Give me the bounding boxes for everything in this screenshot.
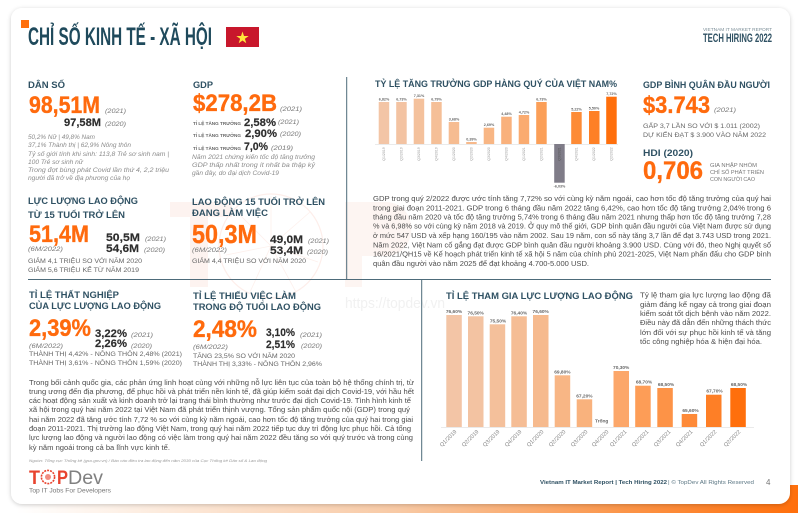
report label: VIETNAM IT MARKET REPORT (703, 27, 772, 32)
panel: GDP: (2021) (280, 106, 302, 113)
chart: labor force participation: 68,50% (658, 382, 675, 388)
panel: employed workers: GIẢM 4,4 TRIỆU SO VỚI NĂM 2020 (192, 256, 306, 265)
chart: labor force participation: 68,70% (636, 380, 653, 386)
panel: GDP per capita: GẤP 3,7 LẦN SO VỚI $ 1.011 (2002) (643, 120, 760, 130)
footer: Vietnam IT Market Report | Tech Hiring 2022 (540, 480, 667, 486)
footer: 4 (766, 478, 771, 487)
chart: labor force participation: 65,60% (682, 408, 699, 414)
text block: GDP commentary: % và 6,98% so với cùng kỳ năm 2018 và 2019. Ở quy mô thế giới, GDP bình quân đầu người của Việt Nam được sử dụng (373, 222, 771, 230)
panel: labor force (28, 195, 166, 274)
panel: underemployment (193, 290, 322, 368)
chart: quarterly GDP growth: 0,39% (466, 138, 477, 142)
panel: underemployment: THÀNH THỊ 3,33% - NÔNG THÔN 2,96% (193, 359, 322, 368)
panel: underemployment: TỈ LỆ THIẾU VIỆC LÀM (193, 290, 296, 302)
chart: quarterly GDP growth: 5,50% (589, 106, 600, 110)
chart: quarterly GDP growth: -6,03% (554, 184, 566, 188)
text block: GDP commentary: GDP trong quý 2/2022 được ước tính tăng 7,72% so với cùng kỳ năm ngoái, cao hơn tốc độ tăng trưởng của quý hai (373, 194, 771, 203)
panel: GDP per capita: (2021) (714, 107, 736, 114)
panel: unemployment: 2,39% (29, 315, 91, 342)
panel: labor force: GIẢM 4,1 TRIỆU SO VỚI NĂM 2020 (28, 256, 142, 265)
panel: employed workers: (2021) (308, 238, 329, 245)
panel: GDP: (2020) (280, 131, 301, 138)
panel: GDP per capita: DỰ KIẾN ĐẠT $ 3.900 VÀO NĂM 2022 (643, 129, 766, 139)
chart: quarterly GDP growth: 6,79% (431, 98, 442, 102)
panel: GDP: 2,90% (245, 128, 277, 140)
chart: labor force participation: Q1/2021 (609, 429, 628, 449)
panel: underemployment: (2021) (300, 332, 322, 339)
chart: labor force participation: TỈ LỆ THAM GIA LỰC LƯỢNG LAO ĐỘNG (446, 290, 633, 302)
chart: quarterly GDP growth: 2,69% (484, 123, 495, 127)
panel: GDP: (2019) (271, 145, 293, 152)
chart: labor force participation: Q4/2021 (675, 429, 694, 449)
chart: labor force participation: 76,40% (511, 310, 528, 316)
panel: GDP: 7,0% (244, 141, 268, 153)
panel: HDI: GIA NHẬP NHÓM (710, 162, 757, 169)
panel: employed workers: (2020) (307, 249, 328, 256)
chart: quarterly GDP growth: 3,68% (449, 118, 460, 122)
chart: quarterly GDP growth: Q4/2021 (575, 147, 579, 161)
panel: GDP per capita: GDP BÌNH QUÂN ĐẦU NGƯỜI (643, 79, 770, 91)
panel: labor force: GIẢM 5,6 TRIỆU KỂ TỪ NĂM 2019 (28, 265, 139, 274)
panel: HDI: 0,706 (643, 157, 703, 185)
panel: GDP: Năm 2021 chứng kiến tốc độ tăng trưởng (192, 154, 316, 161)
text block: labor market context: đoạn 2011-2021. Thị trường lao động Việt Nam, trong quý hai năm 2022 tiếp tục duy trì động lực phục hồi. Cả tổng (29, 424, 411, 433)
chart: labor force participation: Q4/2019 (504, 429, 523, 449)
panel: population: Trong đợt bùng phát Covid lần thứ 4, 2,2 triệu (28, 167, 170, 174)
panel: unemployment: 3,22% (95, 328, 127, 340)
panel: population: 100 Trẻ sơ sinh nữ (28, 159, 84, 166)
panel: population: 97,58M (64, 117, 101, 129)
panel: underemployment: 2,48% (193, 316, 257, 343)
text block: labor market context: kỳ năm ngoái trong cả ba lĩnh vực kinh tế. (29, 443, 170, 452)
panel: labor force: 54,6M (106, 243, 139, 255)
chart: labor force participation: Q1/2022 (699, 429, 718, 449)
divider lines (28, 77, 771, 461)
panel: employed workers (192, 196, 329, 265)
panel: population: (2021) (105, 108, 126, 115)
chart: labor force participation: Q2/2019 (461, 429, 480, 449)
text block: GDP commentary: trong giai đoạn 2011-2021. GDP trong 6 tháng đầu năm 2022 tăng 6,42%, cao hơn tốc độ tăng trưởng 2,04% trong 6 (373, 204, 771, 212)
chart: quarterly GDP growth: 7,72% (606, 92, 617, 96)
panel: HDI: CON NGƯỜI CAO (710, 176, 755, 183)
title: CHỈ SỐ KINH TẾ - XÃ HỘI (28, 21, 212, 51)
panel: unemployment: THÀNH THỊ 4,42% - NÔNG THÔN 2,48% (2021) (29, 349, 182, 358)
text block: participation commentary: kiểm soát tốt dịch bệnh vào năm 2022. (640, 309, 771, 318)
panel: GDP: $278,2B (193, 90, 277, 117)
panel: employed workers: 49,0M (270, 234, 303, 246)
chart: quarterly GDP growth: 6,73% (396, 98, 407, 102)
chart: labor force participation: 68,50% (731, 382, 748, 388)
text block: labor market context: trung ương đến địa phương, để phục hồi và phát triển nền kinh tế, đã giúp kiểm soát đại dịch Covid-19, với hầu hết (29, 387, 414, 396)
text block: participation commentary: tốc công nghiệp hóa & hiện đại hóa. (640, 337, 762, 346)
footer: | © TopDev All Rights Reserved (668, 479, 754, 486)
panel: population (28, 79, 170, 182)
report label (703, 27, 772, 45)
orange square marker (21, 20, 29, 28)
text block: participation commentary: giảm đáng kể ngay cả trong giai đoạn (640, 300, 771, 309)
text block: GDP commentary: ở mức 547 USD và xếp hạng 160/195 vào năm 2002. Sau 19 năm, con số này tăng 3,7 lần để đạt 3.743 USD trong 2021. (373, 231, 771, 240)
chart: quarterly GDP growth: Q3/2020 (487, 147, 491, 161)
panel: GDP: TỈ LỆ TĂNG TRƯỞNG (193, 146, 242, 151)
panel: labor force: (2021) (145, 236, 166, 243)
panel: underemployment: TRONG ĐỘ TUỔI LAO ĐỘNG (193, 301, 321, 313)
chart: quarterly GDP growth: 6,73% (536, 98, 547, 102)
chart: quarterly GDP growth: 4,72% (519, 110, 530, 114)
chart: quarterly GDP growth: 5,22% (571, 108, 582, 112)
panel: population: (2020) (105, 121, 126, 128)
text block: labor market context: Trong bối cảnh quốc gia, các phản ứng linh hoạt cùng với những nỗ lực liên tục của toàn bộ hệ thống chính trị, từ (29, 378, 414, 387)
chart: quarterly GDP growth: Q1/2021 (522, 147, 526, 161)
text block: labor market context: các hoạt động sản xuất và kinh doanh trở lại trạng thái bình thường như trước đại dịch Covid-19. Tình hình kinh tế (29, 396, 411, 405)
text block: GDP commentary: Năm 2022, Việt Nam cố gắng đạt được GDP bình quân đầu người khoảng 3.900 USD. Cùng với đó, theo Nghị quyết số (373, 240, 771, 250)
panel: unemployment: THÀNH THỊ 3,61% - NÔNG THÔN 1,59% (2020) (29, 358, 182, 367)
chart: labor force participation: 75,50% (490, 318, 507, 324)
panel: GDP: gần đây, do đại dịch Covid-19 (192, 170, 280, 177)
panel: underemployment: TĂNG 23,5% SO VỚI NĂM 2020 (193, 351, 295, 360)
chart: labor force participation: Trống (595, 418, 608, 425)
panel: labor force: 50,5M (106, 232, 140, 244)
TopDev logo: Top IT Jobs For Developers (29, 488, 112, 494)
text block: participation commentary (640, 290, 772, 346)
panel: GDP per capita: $3.743 (643, 92, 710, 119)
chart: labor force participation: 76,50% (468, 310, 485, 316)
chart: labor force participation: Q2/2020 (548, 429, 567, 449)
TopDev logo (29, 468, 112, 494)
chart: quarterly GDP growth: Q4/2019 (435, 147, 439, 161)
chart: labor force participation: 70,30% (613, 365, 630, 371)
chart: labor force participation: 69,80% (554, 369, 571, 375)
icon: Vietnam flag (226, 27, 259, 47)
chart: quarterly GDP growth: Q4/2020 (505, 147, 509, 161)
panel: underemployment: (6M/2022) (193, 344, 228, 351)
panel: underemployment: 3,10% (266, 327, 295, 339)
chart: quarterly GDP growth: Q1/2019 (382, 147, 386, 161)
chart: labor force participation: Q2/2021 (631, 429, 650, 449)
chart: labor force participation: Q1/2020 (526, 429, 545, 449)
watermark: faint TopDev logo: https://topdev.vn (345, 295, 445, 312)
panel: underemployment: 2,51% (266, 339, 295, 351)
chart: quarterly GDP growth: TỶ LỆ TĂNG TRƯỞNG GDP HÀNG QUÝ CỦA VIỆT NAM% (375, 78, 617, 90)
panel: GDP per capita (643, 79, 770, 139)
chart: labor force participation: Q4/2020 (591, 429, 610, 449)
chart: quarterly GDP growth (375, 78, 618, 188)
panel: GDP: GDP thấp nhất trong ít nhất ba thập kỷ (192, 162, 316, 169)
panel: underemployment: (2020) (301, 343, 322, 350)
panel: labor force: TỪ 15 TUỔI TRỞ LÊN (28, 209, 125, 221)
panel: population: Tỷ số giới tính khi sinh: 113,8 Trẻ sơ sinh nam | (28, 151, 169, 158)
footer (540, 478, 771, 487)
panel: unemployment (29, 289, 182, 367)
panel: population: 50,2% Nữ | 49,8% Nam (28, 134, 95, 141)
chart: labor force participation: Q3/2021 (653, 429, 672, 449)
text block: labor market context: hai năm 2022 đã tăng ước tính 7,72 % so với cùng kỳ năm ngoái, cao hơn tốc độ tăng trưởng của quý hai trong giai (29, 415, 413, 424)
text block: GDP commentary: quân đầu người vào năm 2025 để đạt khoảng 4.700-5.000 USD. (373, 259, 589, 268)
chart: quarterly GDP growth: Q2/2020 (470, 147, 474, 161)
panel: population: DÂN SỐ (28, 79, 66, 91)
panel: GDP: TỈ LỆ TĂNG TRƯỞNG (193, 133, 242, 138)
panel: unemployment: (6M/2022) (29, 343, 63, 350)
text block: labor market context: xã hội trong quý hai năm 2022 tại Việt Nam đã phát triển thịnh vượng. Tổng sản phẩm quốc nội (GDP) trong quý (29, 405, 410, 414)
panel: HDI (643, 148, 764, 185)
chart: labor force participation: 76,60% (446, 309, 463, 315)
panel: employed workers: 53,4M (270, 245, 303, 257)
panel: GDP: 2,58% (244, 117, 276, 129)
panel: labor force: (6M/2022) (28, 246, 63, 253)
panel: HDI: CHỈ SỐ PHÁT TRIỂN (710, 169, 764, 176)
panel: employed workers: ĐANG LÀM VIỆC (192, 207, 268, 219)
chart: quarterly GDP growth: 6,82% (379, 98, 390, 102)
panel: employed workers: (6M/2022) (192, 247, 227, 254)
chart: quarterly GDP growth: Q1/2020 (452, 147, 456, 161)
chart: quarterly GDP growth: Q2/2021 (540, 147, 544, 161)
TopDev logo: P (57, 468, 68, 489)
chart: quarterly GDP growth: Q2/2019 (400, 147, 404, 161)
panel: population: người đã trở về địa phương của họ (28, 175, 131, 182)
panel: population: 37,1% Thành thị | 62,9% Nông thôn (28, 142, 132, 149)
panel: HDI: HDI (2020) (643, 148, 693, 159)
chart: labor force participation: Q3/2020 (570, 429, 589, 449)
chart: quarterly GDP growth: Q3/2021 (558, 147, 562, 161)
chart: quarterly GDP growth: 7,31% (414, 94, 425, 98)
text block: GDP commentary: tháng đầu năm 2020 và tốc độ tăng trưởng 5,74% trong 6 tháng đầu năm 2021 nhưng thấp hơn tốc độ tăng trưởng 7,28 (373, 212, 771, 222)
panel: population: 98,51M (29, 92, 100, 119)
text block: labor market context (29, 378, 414, 452)
chart: labor force participation: 67,20% (576, 393, 593, 399)
text block: participation commentary: Điều này đã dẫn đến những thách thức (640, 318, 771, 327)
panel: GDP: GDP (193, 80, 214, 91)
panel: GDP (192, 80, 316, 177)
panel: unemployment: 2,26% (95, 338, 127, 350)
chart: labor force participation (439, 290, 754, 449)
panel: GDP: (2021) (278, 119, 299, 126)
text block: labor market context: lực lượng lao động và người lao động có việc làm trong quý hai năm 2022 đều tăng so với quý trước và trong cùng (29, 433, 413, 442)
chart: labor force participation: Q2/2022 (723, 429, 742, 449)
TopDev logo: T (29, 468, 40, 489)
text block: GDP commentary (373, 194, 771, 268)
panel: unemployment: TỈ LỆ THẤT NGHIỆP (29, 289, 120, 301)
panel: labor force: LỰC LƯỢNG LAO ĐỘNG (28, 195, 138, 207)
text block: GDP commentary: 16/2021/QH15 về Kế hoạch phát triển kinh tế xã hội 5 năm của chính phủ 2021-2025, Việt Nam phấn đấu cho GDP bình (373, 250, 771, 258)
background orange band (0, 485, 798, 513)
panel: unemployment: (2020) (131, 343, 152, 350)
chart: labor force participation: 67,70% (706, 389, 723, 395)
panel: GDP: TỈ LỆ TĂNG TRƯỞNG (193, 121, 242, 126)
chart: labor force participation: Q1/2019 (439, 429, 458, 449)
text block: participation commentary: lớn đối với sự phục hồi kinh tế và tăng (640, 328, 771, 337)
panel: unemployment: CỦA LỰC LƯỢNG LAO ĐỘNG (29, 300, 161, 312)
source note: Nguồn: Tổng cục Thống kê (gso.gov.vn) / Báo cáo điều tra lao động đến năm 2030 của Cục Thống kê Dân số & Lao động (29, 459, 267, 463)
chart: labor force participation: Q3/2019 (482, 429, 501, 449)
chart: quarterly GDP growth: 4,48% (501, 112, 512, 116)
watermark: faint TopDev logo (170, 194, 445, 312)
chart: quarterly GDP growth: Q2/2022 (610, 147, 614, 161)
panel: labor force: (2020) (144, 247, 165, 254)
chart: quarterly GDP growth: Q1/2022 (592, 147, 596, 161)
panel: employed workers: 50,3M (192, 219, 257, 249)
panel: unemployment: (2021) (131, 332, 153, 339)
TopDev logo: Dev (68, 468, 104, 489)
panel: employed workers: LAO ĐỘNG 15 TUỔI TRỞ LÊN (192, 196, 325, 208)
chart: labor force participation: 76,60% (533, 309, 550, 315)
text block: participation commentary: Tỷ lệ tham gia lực lượng lao động đã (640, 290, 772, 300)
chart: quarterly GDP growth: Q3/2019 (417, 147, 421, 161)
panel: labor force: 51,4M (29, 221, 89, 248)
